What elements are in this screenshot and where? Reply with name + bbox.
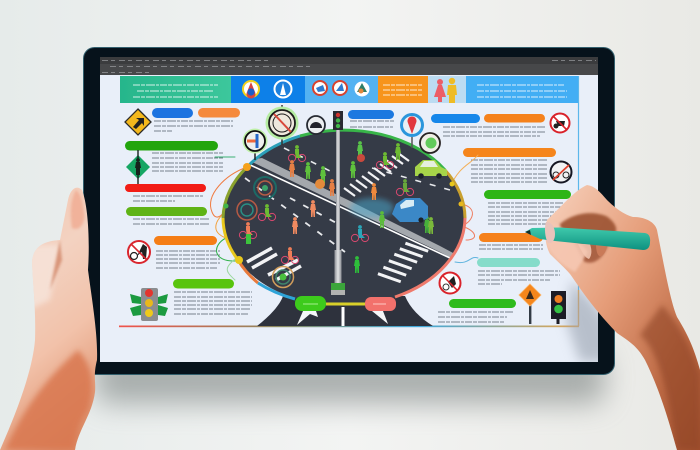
bottom lane marks — [342, 307, 344, 326]
stylus pen — [525, 228, 650, 250]
text block — [438, 312, 513, 322]
header panel: orange note — [378, 76, 428, 103]
thumb highlight — [550, 225, 586, 272]
sign: green turn — [420, 133, 440, 153]
icon: traffic signal — [551, 291, 566, 324]
text block — [133, 219, 210, 224]
pill: green — [449, 299, 516, 308]
capsule: coral — [365, 297, 396, 324]
shade between index and middle fingers — [560, 213, 616, 236]
pill: green — [484, 190, 571, 199]
left column: section 5 — [128, 236, 220, 268]
left column: section 6 — [130, 279, 252, 321]
pill: red — [125, 184, 206, 192]
text block — [152, 153, 223, 171]
header panel: sky blue intro — [466, 76, 578, 103]
right column: section 6 — [477, 258, 560, 284]
right column: section 7 — [438, 272, 516, 322]
text block — [478, 271, 560, 284]
pill: orange — [154, 236, 217, 245]
software toolbar — [100, 57, 598, 75]
text block — [156, 251, 220, 268]
right column: section 3 — [463, 148, 572, 182]
sign cluster above the road — [242, 105, 440, 160]
page border — [119, 76, 579, 327]
infographic page — [119, 76, 579, 327]
signs in front of the hand shadow — [519, 284, 566, 324]
connector squiggles — [211, 155, 478, 280]
text block — [488, 203, 563, 224]
header panel: prohibition icons — [305, 76, 378, 103]
lamp post — [331, 130, 345, 295]
icon: no motorcycle sign — [550, 114, 570, 132]
left column: section 2 — [125, 141, 223, 184]
pill: blue — [152, 108, 193, 118]
pill: green — [125, 141, 218, 150]
tablet shadow — [95, 352, 605, 404]
tablet body — [84, 48, 614, 374]
right hand — [544, 185, 700, 450]
pill: blue — [348, 110, 394, 119]
capsule: green — [295, 296, 326, 325]
cyclists and pedestrians — [239, 141, 434, 273]
icon: yellow warning diamond — [125, 109, 151, 135]
text block — [154, 121, 233, 131]
road roundels — [237, 177, 294, 288]
icon: orange roadworks sign — [519, 284, 541, 324]
text block — [471, 160, 547, 182]
pill: green — [173, 279, 234, 288]
traffic signal on post — [333, 111, 343, 130]
blue car — [392, 198, 428, 223]
icon: traffic light with leaves — [130, 288, 168, 321]
header band — [120, 76, 578, 103]
wrist shading — [640, 305, 700, 450]
pill: orange — [463, 148, 556, 157]
sign: blue pin — [400, 113, 424, 148]
header panel: pedestrians — [428, 76, 466, 103]
left hand — [0, 188, 97, 450]
icon: no bicycle sign — [550, 162, 572, 182]
right column: section 5 — [479, 233, 543, 249]
text block — [443, 127, 545, 136]
thumb tip over pen — [545, 222, 555, 243]
text block — [350, 121, 394, 127]
sign: no turn — [242, 128, 268, 160]
pill: pale teal — [477, 258, 540, 267]
pill: orange — [479, 233, 543, 242]
left column: section 3 — [125, 184, 206, 201]
ring around the road — [223, 130, 465, 304]
shadow of right hand on screen — [561, 280, 598, 362]
left column: section 4 — [126, 207, 210, 224]
header panel: blue icons — [231, 76, 305, 103]
left column: section 1 — [125, 108, 240, 135]
pill: lime — [126, 207, 207, 216]
pill: blue — [431, 114, 480, 123]
text block — [133, 196, 203, 201]
gap below the pen — [576, 244, 609, 264]
text block — [479, 245, 543, 249]
ring nodes — [224, 163, 464, 264]
icon: no dog sign — [440, 272, 460, 294]
sign: no crossing — [266, 105, 298, 145]
central road illustration — [223, 111, 470, 326]
icon: no cycling sign — [128, 241, 150, 263]
header panel: green intro — [120, 76, 231, 103]
road surface — [223, 130, 465, 326]
green car — [415, 160, 447, 179]
right column: section 4 — [484, 190, 571, 224]
sign: helmet — [307, 116, 325, 134]
pill: orange — [484, 114, 545, 122]
road markings and crossings — [245, 148, 470, 284]
icon: green pedestrian diamond — [126, 150, 150, 184]
text block — [174, 292, 252, 314]
right column: top sections — [348, 110, 570, 136]
pill: orange — [198, 108, 240, 118]
